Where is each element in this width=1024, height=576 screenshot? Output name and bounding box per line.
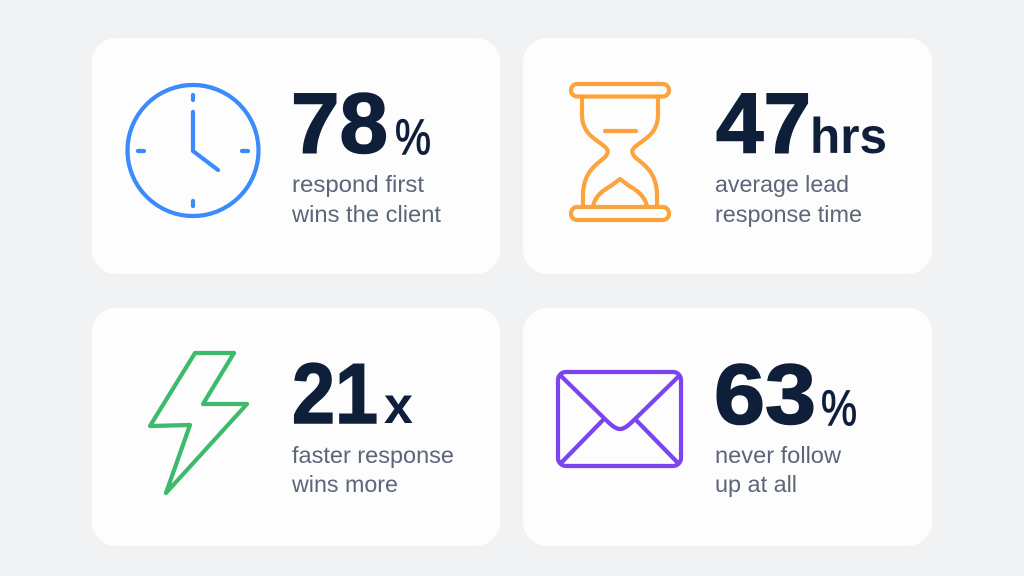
- stat: 21x: x: [384, 377, 413, 435]
- label: average lead response time: response time: [715, 201, 862, 227]
- panel: 21x faster response wins more: [92, 308, 500, 546]
- label: faster response wins more: [291, 442, 454, 497]
- stat: 47hrs: [716, 76, 887, 172]
- label: never follow up at all: up at all: [715, 471, 797, 497]
- stat: 63%: %: [821, 380, 857, 436]
- label: average lead response time: average lead: [715, 171, 849, 197]
- label: never follow up at all: [715, 442, 841, 497]
- stat: 47hrs: hrs: [810, 108, 887, 164]
- icon: lightning bolt: [150, 353, 247, 493]
- icon: envelope: [558, 372, 681, 466]
- stat: 63%: [714, 348, 857, 442]
- panel: 78% respond first: [92, 38, 500, 274]
- stat: 78%: %: [395, 109, 431, 165]
- label: never follow up at all: never follow: [715, 442, 841, 468]
- label: respond first wins the client: respond first: [292, 171, 425, 197]
- icon: hourglass: [571, 84, 669, 220]
- stat: 47hrs: 47: [716, 76, 811, 172]
- stat: 78%: 78: [291, 76, 388, 172]
- icon: clock: [128, 85, 258, 216]
- panel: 63% never follow up at all: [523, 308, 932, 546]
- panel: 47hrs average lead response time: [523, 38, 932, 274]
- label: respond first wins the client: [291, 171, 442, 227]
- label: average lead response time: [715, 171, 862, 227]
- label: faster response wins more: faster response: [292, 442, 454, 468]
- label: respond first wins the client: wins the client: [291, 201, 442, 227]
- label: faster response wins more: wins more: [291, 471, 398, 497]
- stat: 21x: 21: [292, 347, 378, 442]
- stat: 78%: [291, 76, 431, 172]
- stat: 63%: 63: [714, 348, 816, 442]
